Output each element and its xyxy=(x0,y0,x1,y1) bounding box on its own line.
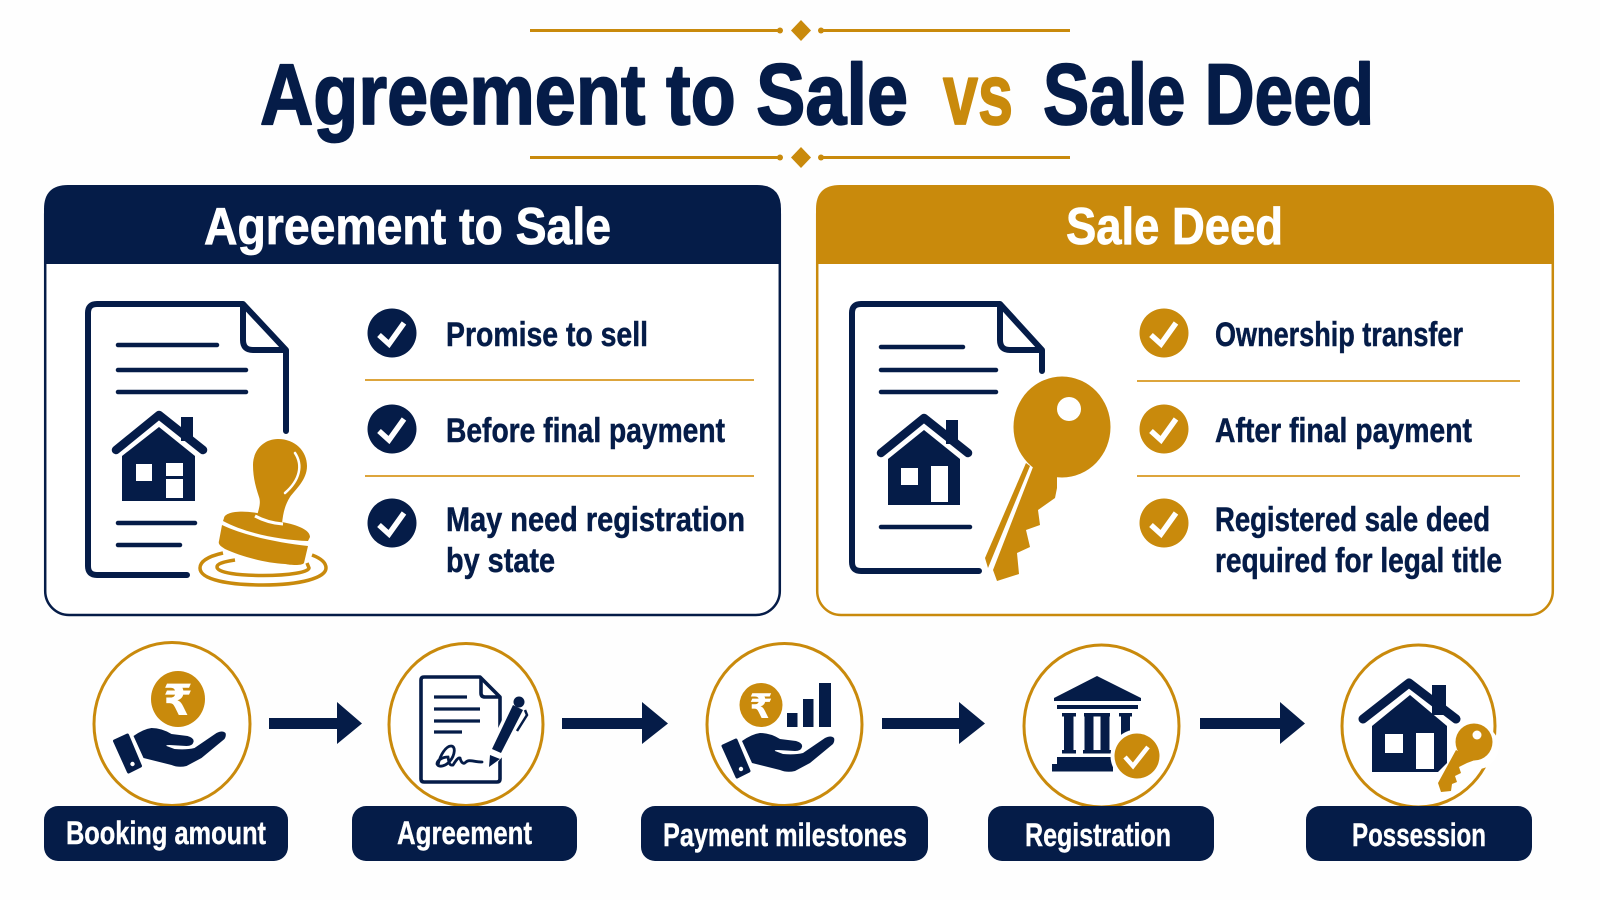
icon: house xyxy=(116,415,203,501)
panel header: sale deed xyxy=(816,185,1554,264)
top ornament xyxy=(530,20,1070,41)
label: possession xyxy=(1306,806,1532,861)
item: registered sale deed required for legal title xyxy=(1140,498,1502,580)
icon: rupee coin xyxy=(740,683,782,727)
step: payment milestones xyxy=(641,644,928,861)
label: booking amount xyxy=(44,806,288,861)
label: registration: Registration xyxy=(1025,817,1171,853)
item: ownership transfer xyxy=(1140,308,1463,358)
icon: signed document xyxy=(421,677,527,782)
icon: stamp xyxy=(200,439,326,585)
icon: hand xyxy=(723,733,834,777)
arrow 4 xyxy=(1200,702,1305,744)
label: payment milestones: Payment milestones xyxy=(663,817,907,853)
label: payment milestones xyxy=(641,806,928,861)
step: registration xyxy=(988,645,1214,861)
label: agreement xyxy=(352,806,577,861)
panel: sale deed xyxy=(816,185,1554,615)
item: may need registration by state: by state xyxy=(446,542,555,580)
item: promise to sell xyxy=(368,308,648,358)
item: registered sale deed required for legal title: required for legal title xyxy=(1215,542,1502,580)
panel header: agreement to sale: Agreement to Sale xyxy=(204,198,611,256)
icon: document with house and stamp xyxy=(88,304,326,585)
arrow 2 xyxy=(562,702,668,744)
item: may need registration by state: May need registration xyxy=(446,501,745,539)
item: before final payment: Before final payment xyxy=(446,412,725,450)
item: promise to sell: Promise to sell xyxy=(446,316,648,354)
item: before final payment xyxy=(368,404,725,454)
icon: hand xyxy=(114,728,226,772)
item: after final payment xyxy=(1140,404,1472,454)
icon: rupee coin: ₹ xyxy=(749,687,773,727)
title: vs xyxy=(943,47,1013,143)
step: booking amount xyxy=(44,642,288,861)
step: possession xyxy=(1306,645,1532,861)
step: agreement xyxy=(352,644,577,861)
icon: rupee coin: ₹ xyxy=(163,676,193,726)
item: registered sale deed required for legal title: Registered sale deed xyxy=(1215,501,1490,539)
bottom title ornament xyxy=(530,147,1070,168)
title: Sale Deed xyxy=(1043,47,1374,143)
arrow 1 xyxy=(269,702,362,744)
panel: agreement to sale xyxy=(44,185,781,615)
icon: bank with check xyxy=(1052,676,1164,782)
arrow 3 xyxy=(882,702,985,744)
label: agreement: Agreement xyxy=(397,815,532,851)
panel header: agreement to sale xyxy=(44,185,781,264)
label: registration xyxy=(988,806,1214,861)
icon: rupee coin xyxy=(151,671,205,727)
title: Agreement to Sale xyxy=(260,47,908,143)
icon: bars xyxy=(787,683,831,727)
icon: house with key xyxy=(1363,683,1499,792)
label: possession: Possession xyxy=(1352,817,1486,853)
icon: key xyxy=(985,376,1110,581)
icon: document with house and key xyxy=(852,304,1110,581)
item: may need registration by state xyxy=(368,498,745,580)
panel header: sale deed: Sale Deed xyxy=(1066,198,1283,256)
icon: house xyxy=(881,418,968,505)
item: after final payment: After final payment xyxy=(1215,412,1472,450)
title xyxy=(260,47,1374,143)
label: booking amount: Booking amount xyxy=(66,815,266,851)
item: ownership transfer: Ownership transfer xyxy=(1215,316,1463,354)
